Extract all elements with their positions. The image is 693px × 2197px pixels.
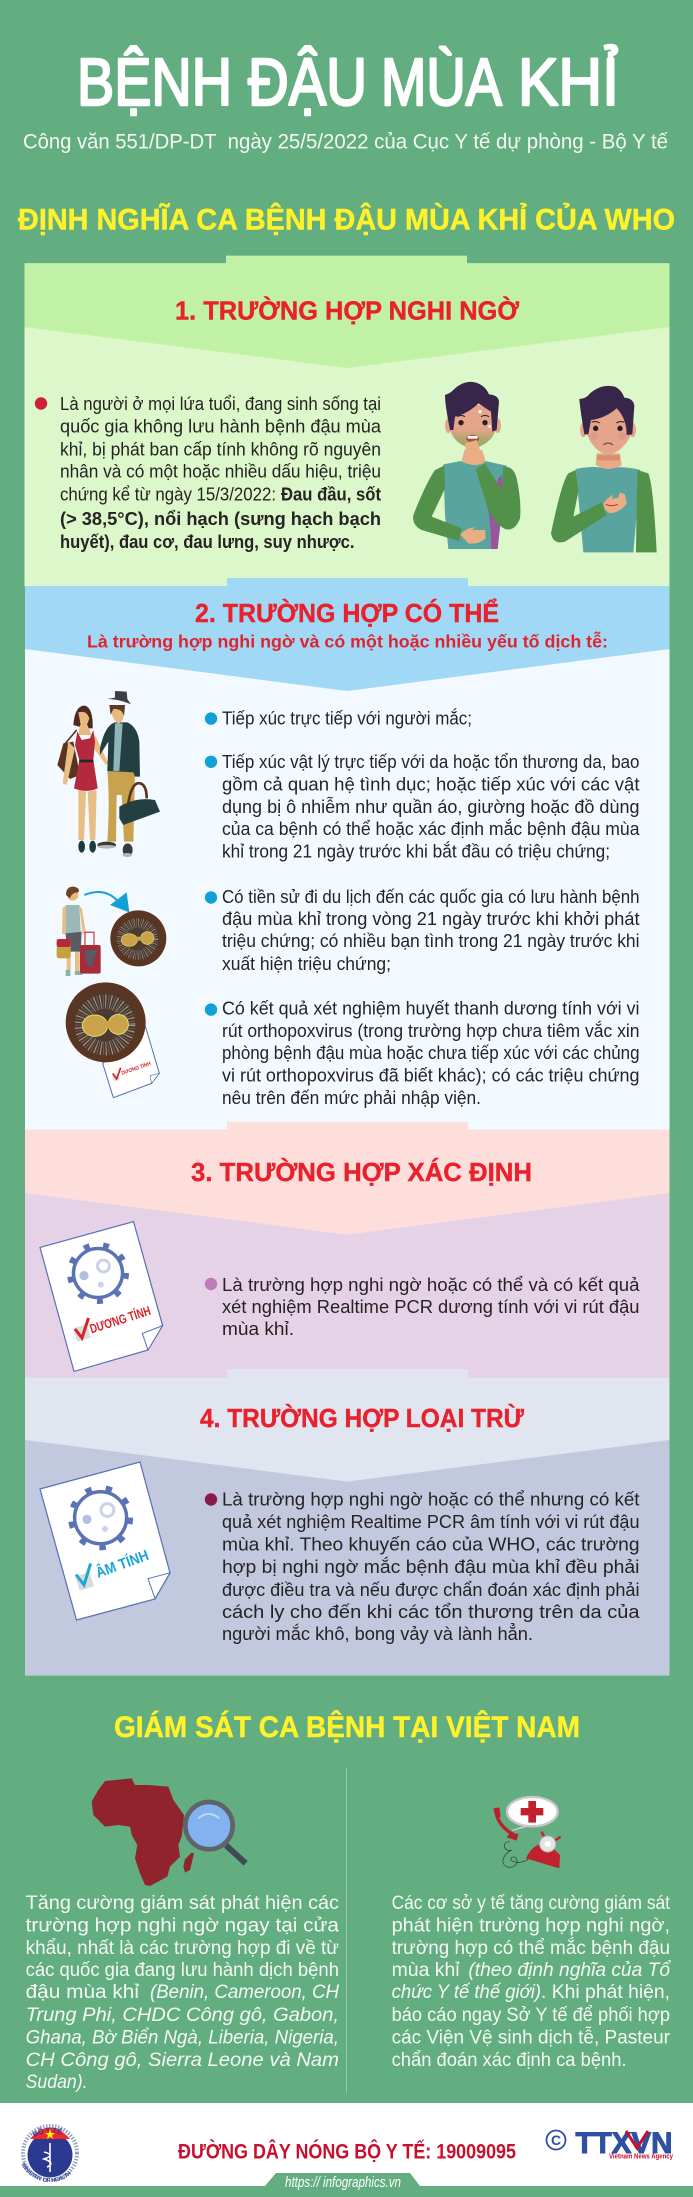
text: left column: đậu mùa khỉ (26, 1982, 140, 2003)
panel 1 text: Đau đầu, sốt (281, 484, 381, 505)
illustration: test paper and virus micrograph (66, 982, 159, 1098)
logo: TTXVN: Vietnam News Agency (609, 2152, 674, 2160)
heading: surveillance in Vietnam: GIÁM SÁT CA BỆNH TẠI VIỆT NAM (114, 1710, 580, 1744)
text: serology test: phòng bệnh đậu mùa hoặc chưa tiếp xúc với các chủng (222, 1042, 640, 1063)
text: right column: báo cáo ngay Sở Y tế để phối hợp (392, 2005, 670, 2026)
text: right column: . Khi phát hiện, (541, 1982, 670, 2003)
text: serology test: vi rút orthopoxvirus đã biết khác); có các triệu chứng (222, 1064, 640, 1085)
panel 1 text: (> 38,5°C), nổi hạch (sưng hạch bạch (60, 508, 381, 529)
bullet: serology test (205, 1003, 217, 1016)
title: ĐẬU (248, 45, 367, 120)
text: direct contact: Tiếp xúc trực tiếp với người mắc; (222, 707, 472, 728)
icon: positive test paper: DƯƠNG TÍNH (88, 1303, 152, 1336)
panel 4 text: mùa khỉ. Theo khuyến cáo của WHO, các trường (222, 1534, 640, 1554)
panel 4 text: cách ly cho đến khi các tổn thương trên da của (222, 1601, 640, 1622)
subtitle (23, 130, 668, 154)
panel 3 body (25, 1130, 670, 1378)
text: left column: các quốc gia đang lưu hành dịch bệnh (26, 1960, 339, 1981)
text: left column (26, 1893, 339, 2093)
text: serology test (222, 998, 640, 1108)
text: right column: các Viện Vệ sinh dịch tễ, Pasteur (392, 2026, 671, 2048)
panel 1 text: nhân và có một hoặc nhiều dấu hiệu, triệu (60, 461, 381, 482)
text: right column: mùa khỉ (392, 1960, 460, 1981)
icon: positive test paper (40, 1222, 163, 1371)
text: serology test: rút orthopoxvirus (trong trường hợp chưa tiêm vắc xin (222, 1020, 640, 1041)
footer band (0, 2103, 693, 2186)
text: right column (392, 1893, 671, 2071)
icon: red telephone with medical cross (493, 1797, 561, 1868)
text: left column: (Benin, Cameroon, CH (150, 1982, 339, 2003)
text: right column: chẩn đoán xác định ca bệnh. (392, 2050, 627, 2071)
panel 2: probable case (25, 578, 670, 1130)
website tab: https:// infographics.vn (285, 2175, 401, 2191)
list of epidemiological factors (205, 707, 640, 1108)
panel 4 text: được điều tra và nếu được chẩn đoán xác định phải (222, 1579, 640, 1600)
text: travel history: xuất hiện triệu chứng; (222, 953, 391, 974)
title: BỆNH (77, 45, 232, 120)
icon: man with sore throat (413, 382, 520, 549)
panel 2 subheading: Là trường hợp nghi ngờ và có một hoặc nhiều yếu tố dịch tễ: (87, 630, 608, 652)
panel 4 text: quả xét nghiệm Realtime PCR âm tính với vi rút đậu (222, 1511, 640, 1532)
website tab (0, 2173, 693, 2197)
panel 1 body (24, 263, 670, 586)
text: physical contact: Tiếp xúc vật lý trực tiếp với da hoặc tổn thương da, bao (222, 751, 640, 772)
text: left column: trường hợp nghi ngờ ngay tại cửa (26, 1916, 339, 1937)
panel 4 text (222, 1489, 640, 1644)
text: physical contact: dụng bị ô nhiễm như quần áo, giường hoặc đồ dùng (222, 796, 640, 817)
panel 2 body (25, 586, 670, 1130)
illustration: couple with bags (57, 691, 160, 857)
panel 1 heading: 1. TRƯỜNG HỢP NGHI NGỜ (175, 296, 520, 326)
icon: man with chest rash (551, 386, 657, 552)
logo: TTXVN: C (551, 2132, 561, 2148)
icon: negative test paper (40, 1462, 170, 1620)
text: right column: trường hợp có thể mắc bệnh đậu (392, 1937, 670, 1959)
panel 1: suspected case (24, 256, 670, 586)
text: serology test: Có kết quả xét nghiệm huyết thanh dương tính với vi (222, 998, 640, 1019)
panel 1 text: quốc gia không lưu hành bệnh đậu mùa (60, 416, 382, 436)
panel 1 text (60, 393, 382, 552)
text: right column: chức Y tế thế giới) (392, 1982, 541, 2003)
title: MÙA (381, 45, 502, 120)
text: right column: (theo định nghĩa của Tổ (468, 1960, 671, 1981)
text: left column: Ghana, Bờ Biển Ngà, Liberia, Nigeria, (26, 2028, 339, 2048)
panel 1 bullet (35, 397, 47, 410)
icon: negative test paper: ÂM TÍNH (93, 1546, 151, 1582)
logo: Ministry of Health: MINISTRY OF HEALTH (22, 2162, 72, 2182)
heading: WHO definition: ĐỊNH NGHĨA CA BỆNH ĐẬU MÙA KHỈ CỦA WHO (18, 203, 675, 237)
text: travel history (222, 886, 640, 974)
panel 3 text: mùa khỉ. (222, 1318, 294, 1339)
bullet (205, 1278, 217, 1290)
bullet: physical contact (205, 756, 217, 768)
bullet (205, 1493, 217, 1506)
text: right column: phát hiện trường hợp nghi ngờ, (392, 1916, 670, 1937)
text: right column: Các cơ sở y tế tăng cường giám sát (392, 1893, 671, 1914)
panel 3 heading: 3. TRƯỜNG HỢP XÁC ĐỊNH (191, 1157, 532, 1187)
text: left column: khẩu, nhất là các trường hợp đi về từ (26, 1938, 339, 1959)
panel 4: excluded case (25, 1369, 670, 1676)
text: physical contact: khỉ trong 21 ngày trước khi bắt đầu có triệu chứng; (222, 840, 610, 862)
panel 1 text: huyết), đau cơ, đau lưng, suy nhược. (60, 531, 354, 552)
text: travel history: đậu mùa khỉ trong vòng 21 ngày trước khi khởi phát (222, 908, 640, 929)
panel 4 header banner (25, 1369, 670, 1482)
text: physical contact (222, 751, 640, 862)
text: physical contact: gồm cả quan hệ tình dục; hoặc tiếp xúc với các vật (222, 774, 640, 795)
logo: Ministry of Health (21, 2124, 79, 2182)
title (77, 45, 619, 120)
bullet: direct contact (205, 712, 217, 725)
bullet: travel history (205, 891, 217, 904)
panel 1 header banner (24, 256, 670, 368)
text: serology test: nêu trên đến mức phải nhập viện. (222, 1087, 481, 1108)
text: physical contact: của ca bệnh có thể hoặc xác định mắc bệnh đậu mùa (222, 818, 640, 839)
illustration: traveller and arrow to virus (57, 887, 166, 976)
illustration: test paper and virus micrograph: DƯƠNG TÍNH (120, 1059, 152, 1077)
panel 3 header banner (25, 1122, 670, 1235)
icon: Africa with magnifier (92, 1778, 246, 1886)
panel 4 body (25, 1378, 670, 1676)
text: travel history: triệu chứng; có nhiều bạn tình trong 21 ngày trước khi (222, 930, 640, 951)
title: KHỈ (518, 45, 619, 120)
panel 3 text: Là trường hợp nghi ngờ hoặc có thể và có kết quả (222, 1274, 640, 1295)
subtitle: ngày 25/5/2022 của Cục Y tế dự phòng - Bộ Y tế (228, 130, 668, 154)
text: left column: Trung Phi, CHDC Công gô, Gabon, (26, 2005, 339, 2026)
panel 3: confirmed case (25, 1122, 670, 1378)
text: travel history: Có tiền sử đi du lịch đến các quốc gia có lưu hành bệnh (222, 886, 640, 907)
panel 4 text: hợp bị nghi ngờ mắc bệnh đậu mùa khỉ đều phải (222, 1556, 640, 1577)
subtitle: Công văn 551/DP-DT (23, 130, 217, 154)
panel 4 heading: 4. TRƯỜNG HỢP LOẠI TRỪ (200, 1403, 524, 1433)
hotline: ĐƯỜNG DÂY NÓNG BỘ Y TẾ: 19009095 (178, 2140, 516, 2164)
panel 4 text: Là trường hợp nghi ngờ hoặc có thể nhưng có kết (222, 1489, 640, 1510)
panel 1 text: khỉ, bị phát ban cấp tính không rõ nguyên (60, 438, 381, 460)
panel 3 text: xét nghiệm Realtime PCR dương tính với vi rút đậu (222, 1296, 640, 1317)
logo: Ministry of Health: BỘ Y TẾ (32, 2128, 63, 2137)
panel 1 text: chứng kể từ ngày 15/3/2022: (60, 484, 276, 505)
panel 1 text: Là người ở mọi lứa tuổi, đang sinh sống tại (60, 393, 381, 414)
panel 2 heading: 2. TRƯỜNG HỢP CÓ THỂ (195, 598, 499, 628)
text: left column: Tăng cường giám sát phát hiện các (26, 1893, 339, 1914)
panel 2 header banner (25, 578, 670, 691)
text: left column: Sudan). (26, 2072, 88, 2093)
panel 3 text (222, 1274, 640, 1339)
text: left column: CH Công gô, Sierra Leone và Nam (26, 2050, 339, 2071)
logo: TTXVN: TTXVN (576, 2127, 672, 2160)
panel 4 text: người mắc khô, bong vảy và lành hẳn. (222, 1623, 533, 1644)
